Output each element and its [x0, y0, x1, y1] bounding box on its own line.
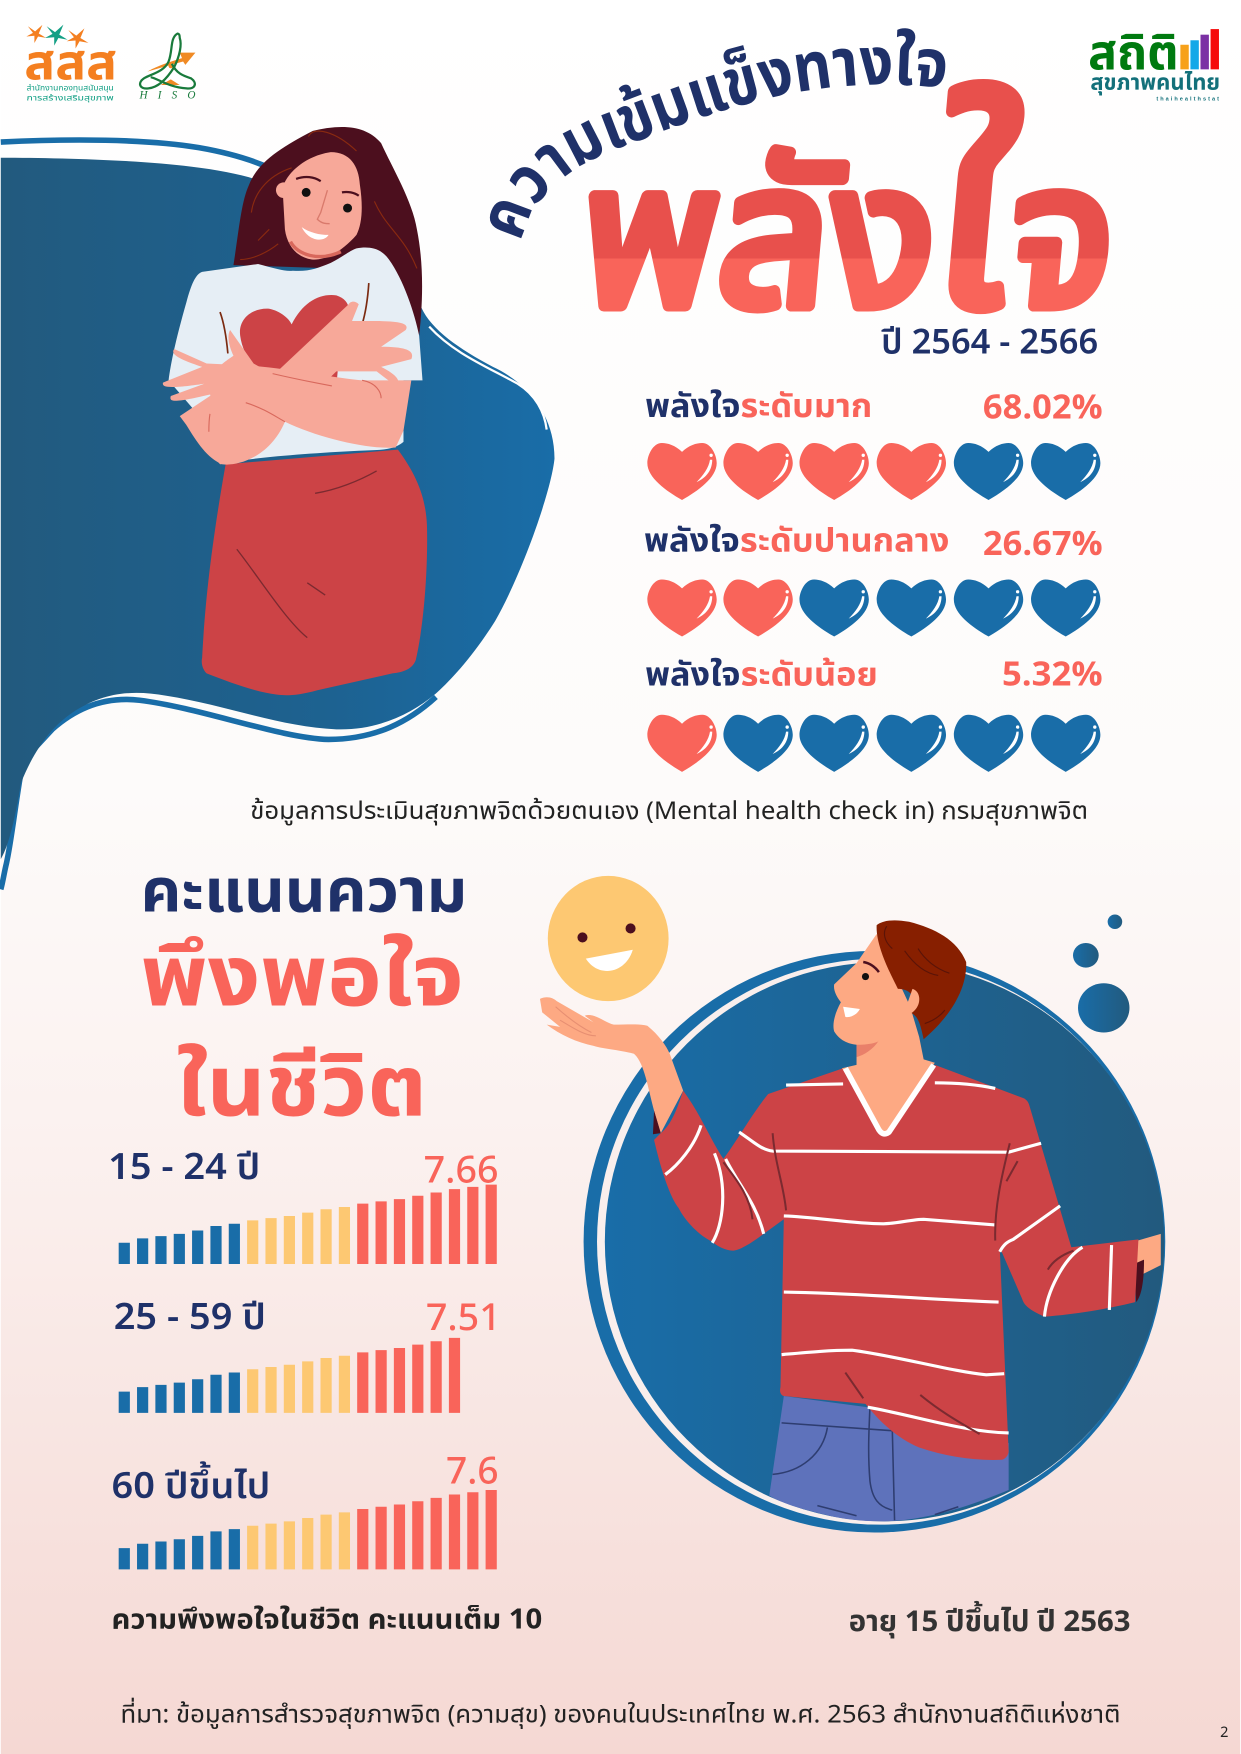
source note: mental health check in: ข้อมูลการประเมินสุขภาพจิตด้วยตนเอง (Mental health check in) กรมสุขภาพจิต	[250, 794, 1088, 831]
bar chart: 15-24: 15 - 24 ปี	[108, 1142, 260, 1196]
label: พลังใจระดับมาก	[645, 383, 872, 432]
bar chart: 60+: 60 ปีขึ้นไป	[112, 1461, 270, 1515]
illustration: woman hugging herself	[163, 127, 427, 695]
left arm and hand	[540, 997, 683, 1133]
hearts	[647, 579, 1100, 636]
title: curved path	[522, 85, 963, 243]
logo: thaihealthstat: thaihealthstat	[1156, 97, 1219, 103]
heading: life satisfaction: คะแนนความ	[141, 849, 467, 940]
illustration: man in striped sweater	[540, 920, 1161, 1521]
bar chart: 25-59	[114, 1291, 501, 1413]
blob panel behind woman	[1, 140, 555, 889]
hair strands	[884, 926, 949, 1024]
source note: national statistics office: ที่มา: ข้อมูลการสำรวจสุขภาพจิต (ความสุข) ของคนในประเทศไทย พ.ศ. 2563 สำนักงานสถิติแห่งชาติ	[120, 1698, 1121, 1735]
bar chart: 60+	[112, 1444, 499, 1569]
value: 5.32%	[1002, 651, 1103, 702]
skirt	[202, 450, 427, 695]
hair	[233, 127, 422, 345]
icon: three figures	[26, 25, 88, 49]
jeans	[769, 1396, 1009, 1521]
logo: thaihealthstat: สถิติ	[1088, 18, 1179, 92]
V-neck collar	[845, 1065, 934, 1134]
sweater stripes	[665, 1083, 1112, 1433]
ear	[905, 989, 919, 1014]
panel: medium level	[644, 517, 1103, 636]
logo: thaihealthstat	[1088, 18, 1220, 103]
logo: HISO	[138, 34, 195, 101]
hair strands	[240, 131, 417, 268]
head and neck	[833, 934, 935, 1137]
bar chart: 15-24: 7.66	[424, 1143, 499, 1199]
hair	[877, 920, 966, 1039]
logo: SSS: สสส	[24, 28, 117, 102]
sweater	[654, 1065, 1138, 1460]
logo: thaihealthstat: สุขภาพคนไทย	[1090, 66, 1220, 100]
face	[283, 152, 362, 260]
right hand	[1134, 1234, 1161, 1279]
hearts	[647, 715, 1100, 772]
label: พลังใจระดับน้อย	[645, 652, 878, 701]
heading: life satisfaction	[141, 849, 467, 1154]
value: 26.67%	[983, 520, 1103, 571]
bar chart: 60+: 7.6	[446, 1444, 499, 1500]
hearts	[647, 443, 1100, 500]
circle backdrop	[584, 951, 1165, 1533]
logo: SSS: การสร้างเสริมสุขภาพ	[27, 92, 114, 105]
bar chart: 25-59: 7.51	[426, 1291, 501, 1347]
value: 68.02%	[983, 383, 1103, 434]
heading: life satisfaction: ในชีวิต	[176, 1026, 427, 1154]
bars	[1180, 29, 1219, 69]
shirt	[169, 248, 423, 461]
heart on shirt	[240, 295, 349, 386]
icon: bubbles	[1073, 914, 1129, 1032]
bar chart: 15-24	[108, 1142, 499, 1264]
page number: 2	[1220, 1722, 1228, 1744]
sweater folds	[723, 1133, 1074, 1434]
heading: life satisfaction: พึงพอใจ	[141, 917, 464, 1045]
hand creases	[556, 1007, 596, 1036]
year range: ปี 2564 - 2566	[881, 316, 1098, 369]
bar chart: 25-59: 25 - 59 ปี	[114, 1292, 266, 1346]
eyes and smile	[291, 177, 359, 257]
face features	[843, 962, 879, 1057]
chart caption: ความพึงพอใจในชีวิต คะแนนเต็ม 10	[112, 1599, 542, 1642]
label: พลังใจระดับปานกลาง	[644, 517, 949, 566]
arms	[163, 349, 411, 465]
logo: HISO: H I S O	[138, 89, 195, 101]
age note: อายุ 15 ปีขึ้นไป ปี 2563	[849, 1600, 1131, 1645]
logo: SSS: สำนักงานกองทุนสนับสนุน	[27, 82, 114, 95]
icon: smiley	[548, 876, 669, 1001]
panel: high level	[645, 383, 1103, 500]
shirt folds	[220, 283, 369, 353]
sleeve cuffs	[653, 1111, 1144, 1302]
title curved text: ความเข้มแข็งทางใจ	[490, 28, 946, 238]
panel: low level	[645, 651, 1103, 772]
title: big word: พลังใจ	[567, 26, 1134, 425]
